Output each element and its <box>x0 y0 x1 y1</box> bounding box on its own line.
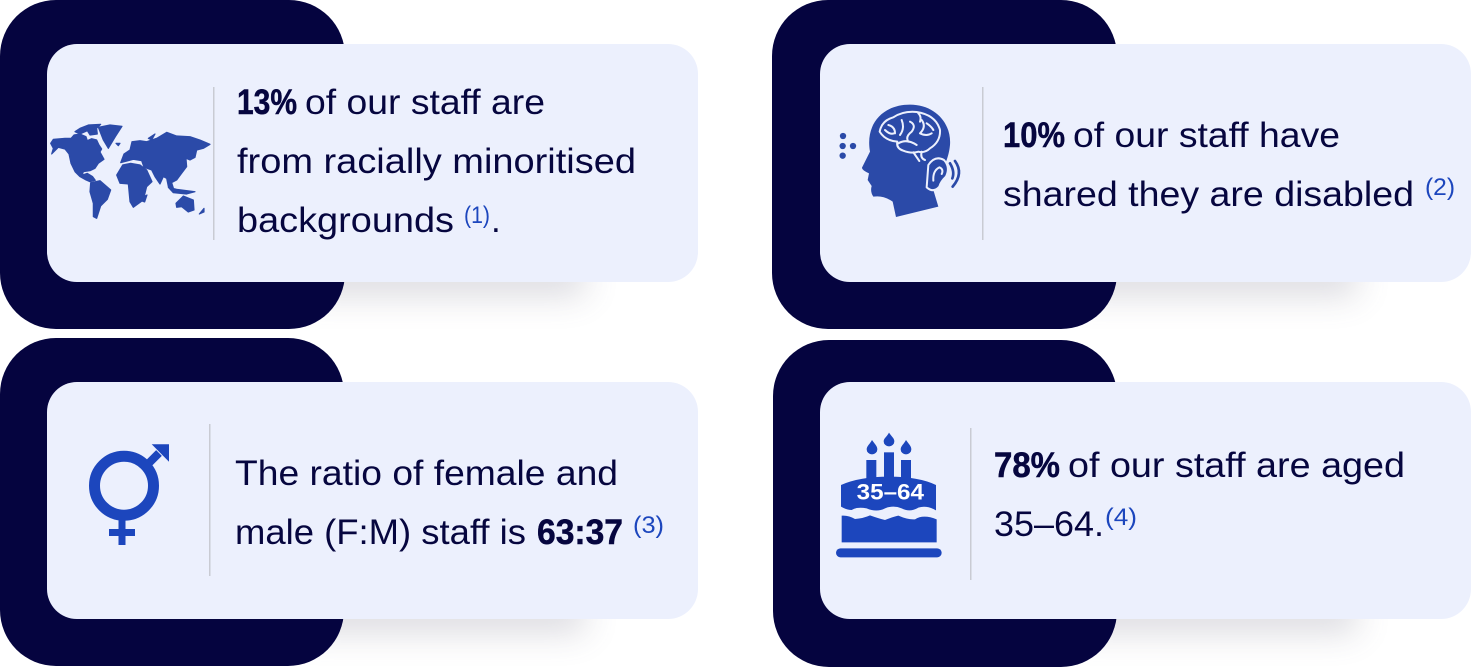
icon: gender symbol <box>94 444 169 545</box>
panel: gender ratio <box>0 338 698 666</box>
text: gender ratio statistic <box>235 454 664 552</box>
panel: disabled staff <box>772 0 1471 329</box>
text: 13% statistic: backgrounds <box>237 201 454 240</box>
text: gender ratio statistic: The ratio of female and <box>235 454 618 493</box>
text: 13% statistic: (1) <box>464 202 490 229</box>
text: 10% statistic: of our staff have <box>1073 116 1340 155</box>
text: 13% statistic: 13% <box>237 83 297 122</box>
text: 13% statistic: . <box>491 201 501 240</box>
text: 13% statistic: from racially minoritised <box>237 142 636 181</box>
text: 78% statistic: (4) <box>1105 504 1137 531</box>
divider <box>209 424 210 576</box>
text: 78% statistic: 35–64. <box>994 505 1104 544</box>
panel: age range <box>773 340 1471 667</box>
text: 78% statistic: of our staff are aged <box>1068 446 1405 485</box>
icon: head with brain and ear <box>839 105 959 217</box>
text: 10% statistic: (2) <box>1425 174 1455 201</box>
icon: birthday cake <box>836 433 942 557</box>
text: gender ratio statistic: male (F:M) staff is <box>235 513 526 552</box>
text: 78% statistic <box>994 446 1405 544</box>
icon: birthday cake: 35–64 <box>857 479 925 504</box>
text: 10% statistic: shared they are disabled <box>1003 175 1414 214</box>
divider <box>982 87 984 240</box>
text: 10% statistic: 10% <box>1003 116 1065 155</box>
text: 10% statistic <box>1003 116 1455 214</box>
text: 13% statistic: of our staff are <box>305 83 545 122</box>
divider <box>213 87 214 240</box>
icon: world map <box>51 124 210 218</box>
panel: racially minoritised staff <box>0 0 698 329</box>
text: gender ratio statistic: (3) <box>633 512 664 539</box>
text: 13% statistic <box>237 83 636 240</box>
divider <box>970 428 972 580</box>
text: gender ratio statistic: 63:37 <box>537 513 623 552</box>
text: 78% statistic: 78% <box>994 446 1060 485</box>
